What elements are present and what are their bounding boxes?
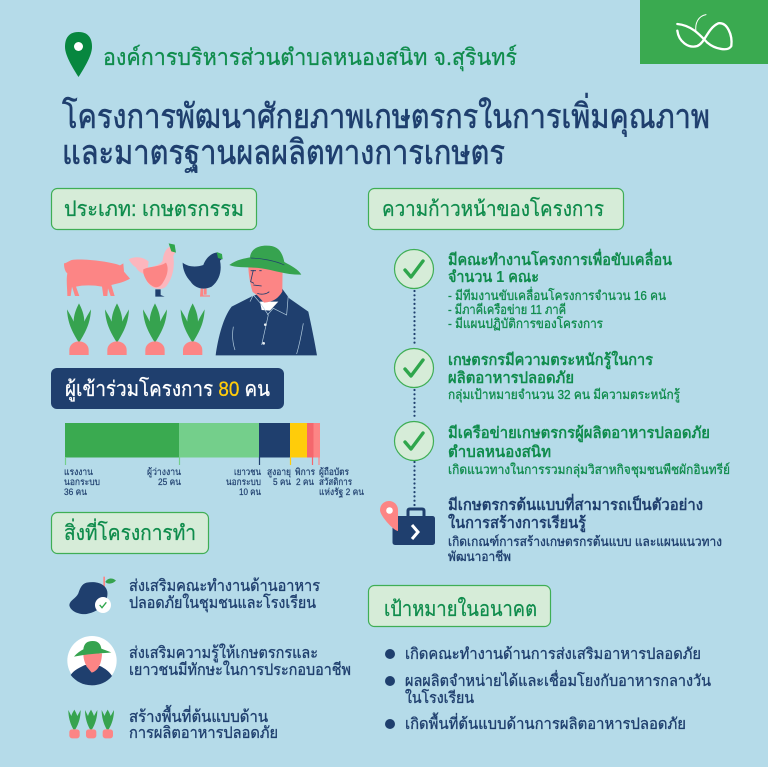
icon: location pin	[65, 32, 92, 77]
progress item 4	[448, 493, 722, 564]
stacked bar chart	[64, 423, 364, 498]
progress item 1: - มีภาคีเครือข่าย 11 ภาคี	[448, 302, 566, 317]
goals list: ในโรงเรียน	[405, 689, 474, 707]
progress item 2: กลุ่มเป้าหมายจำนวน 32 คน มีความตระหนักรู้	[448, 387, 680, 403]
icon: hen	[183, 252, 223, 297]
bar labels: ผู้ถือบัตร	[319, 467, 349, 478]
progress item 1: - มีทีมงานขับเคลื่อนโครงการจำนวน 16 คน	[448, 287, 666, 303]
progress item 1: - มีแผนปฏิบัติการของโครงการ	[448, 316, 603, 331]
heading: activities	[52, 512, 208, 554]
bar labels: ผู้ว่างงาน	[147, 467, 181, 478]
heading: future goals	[368, 586, 550, 626]
progress item 4: มีเกษตรกรต้นแบบที่สามารถเป็นตัวอย่าง	[448, 493, 703, 514]
icons: small carrots	[68, 710, 114, 738]
bar labels: นอกระบบ	[226, 477, 261, 488]
illustration: animals, carrots and farmer	[64, 243, 317, 355]
progress item 2	[448, 350, 680, 403]
goals list	[385, 646, 711, 733]
logo block	[640, 0, 768, 64]
participants banner	[51, 368, 284, 409]
heading: progress	[368, 188, 624, 230]
organisation name: องค์การบริหารส่วนตำบลหนองสนิท จ.สุรินทร์	[103, 44, 517, 71]
icon: mango with check	[69, 577, 116, 614]
icons: carrots	[67, 303, 205, 355]
progress item 1	[448, 248, 672, 331]
bar labels: 5 คน	[273, 477, 291, 488]
heading: type	[52, 188, 256, 230]
bar labels: 2 คน	[296, 477, 314, 488]
progress item 3: เกิดแนวทางในการรวมกลุ่มวิสาหกิจชุมชนพืชผักอินทรีย์	[448, 462, 730, 478]
goals list: ผลผลิตจำหน่ายได้และเชื่อมโยงกับอาหารกลางวัน	[405, 670, 711, 690]
icon: rooster	[129, 243, 176, 297]
title	[62, 93, 710, 173]
bar labels: 10 คน	[239, 487, 261, 498]
progress item 4: ในการสร้างการเรียนรู้	[448, 513, 587, 534]
icon: farmer	[216, 246, 317, 355]
bar labels: นอกระบบ	[64, 477, 100, 488]
timeline checks	[394, 250, 434, 460]
heading: progress: ความก้าวหน้าของโครงการ	[382, 197, 604, 221]
bar labels: เยาวชน	[234, 467, 261, 478]
bar labels	[64, 467, 364, 498]
bar labels: 25 คน	[158, 477, 181, 488]
timeline dots	[413, 291, 416, 507]
activity text: การผลิตอาหารปลอดภัย	[129, 725, 278, 742]
heading: future goals: เป้าหมายในอนาคต	[384, 597, 537, 621]
bar labels: พิการ	[295, 467, 315, 478]
activity text: ปลอดภัยในชุมชนและโรงเรียน	[129, 593, 316, 613]
progress item 2: ผลิตอาหารปลอดภัย	[448, 369, 574, 387]
title: และมาตรฐานผลผลิตทางการเกษตร	[62, 134, 505, 173]
activity text	[129, 577, 351, 742]
icon: farmer portrait	[67, 636, 117, 685]
bar labels: สูงอายุ	[267, 467, 291, 478]
progress item 4: พัฒนาอาชีพ	[448, 549, 511, 564]
bar labels: สวัสดิการ	[319, 477, 352, 488]
goals list: เกิดพื้นที่ต้นแบบด้านการผลิตอาหารปลอดภัย	[405, 712, 686, 733]
participants banner: ผู้เข้าร่วมโครงการ 80 คน	[65, 377, 270, 402]
bar labels: 36 คน	[64, 487, 87, 498]
heading: type: ประเภท: เกษตรกรรม	[64, 198, 244, 221]
icon: briefcase with location pin	[380, 501, 435, 545]
heading: activities: สิ่งที่โครงการทำ	[64, 518, 196, 545]
progress item 1: จำนวน 1 คณะ	[448, 268, 539, 286]
icon: pig	[64, 260, 130, 296]
bar labels: แห่งรัฐ 2 คน	[319, 487, 364, 498]
activity text: สร้างพื้นที่ต้นแบบด้าน	[129, 705, 268, 726]
activity text: เยาวชนมีทักษะในการประกอบอาชีพ	[129, 660, 351, 679]
progress item 3: มีเครือข่ายเกษตรกรผู้ผลิตอาหารปลอดภัย	[448, 424, 710, 444]
progress item 3: ตำบลหนองสนิท	[448, 443, 551, 461]
progress item 2: เกษตรกรมีความตระหนักรู้ในการ	[448, 350, 654, 371]
activity icons	[67, 577, 117, 738]
bar labels: แรงงาน	[64, 467, 93, 478]
goals list: เกิดคณะทำงานด้านการส่งเสริมอาหารปลอดภัย	[405, 646, 701, 663]
progress item 1: มีคณะทำงานโครงการเพื่อขับเคลื่อน	[448, 248, 672, 269]
activity text: ส่งเสริมความรู้ให้เกษตรกรและ	[129, 643, 318, 663]
progress item 4: เกิดเกณฑ์การสร้างเกษตรกรต้นแบบ และแผนแนวทาง	[448, 534, 722, 549]
progress item 3	[448, 424, 730, 478]
activity text: ส่งเสริมคณะทำงานด้านอาหาร	[129, 577, 320, 595]
